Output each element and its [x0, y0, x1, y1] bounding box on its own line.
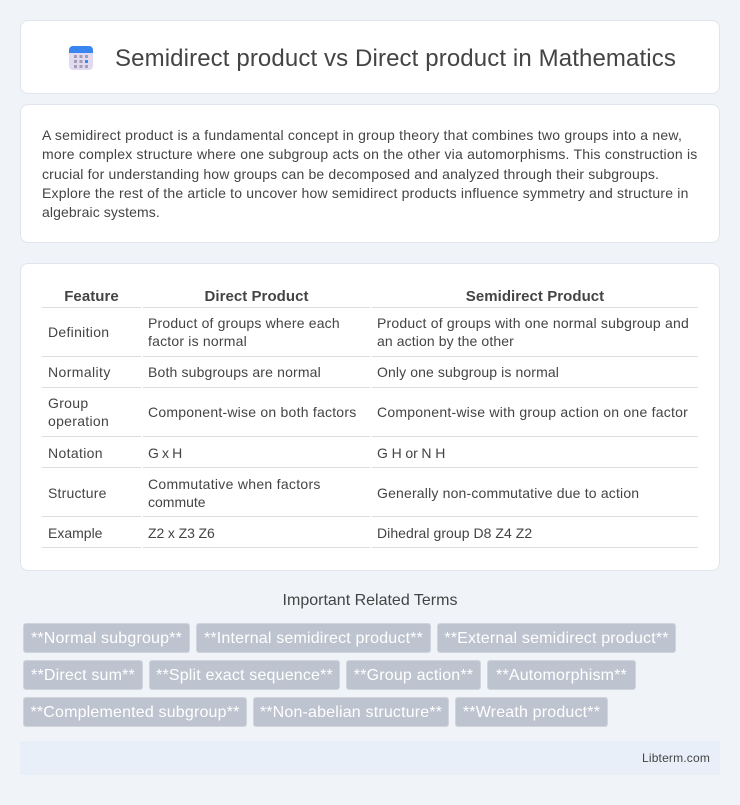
semidirect: example: Dihedral group D8 Z4 Z2 — [377, 525, 532, 541]
tag — [23, 623, 190, 653]
row: Structure: Structure — [48, 485, 107, 501]
footer bar — [20, 741, 720, 775]
direct: definition — [148, 315, 340, 349]
row: Group operation: operation — [48, 413, 109, 429]
tag — [437, 623, 676, 653]
intro paragraph card — [20, 104, 720, 243]
semidirect: group operation: Component-wise with group action on one factor — [377, 404, 688, 420]
tag — [346, 660, 481, 690]
tag: **Split exact sequence** — [156, 667, 333, 684]
related terms heading: Important Related Terms — [283, 592, 457, 609]
comparison table card — [20, 263, 720, 571]
semidirect: definition — [377, 315, 689, 349]
column heading: Direct Product: Direct Product — [204, 288, 309, 305]
direct: normality: Both subgroups are normal — [148, 364, 321, 380]
semidirect: notation: G H or N H — [377, 445, 445, 461]
row: Example: Example — [48, 525, 102, 541]
tag: **Internal semidirect product** — [204, 630, 423, 647]
tag — [455, 697, 608, 727]
direct: notation: G x H — [148, 445, 182, 461]
tag: **Wreath product** — [463, 704, 600, 721]
tag: **Direct sum** — [31, 667, 135, 684]
tag: **Group action** — [354, 667, 473, 684]
tag — [23, 697, 247, 727]
tag — [253, 697, 449, 727]
tag: **Normal subgroup** — [31, 630, 182, 647]
column heading: Semidirect Product: Semidirect Product — [466, 288, 604, 305]
tag — [487, 660, 636, 690]
semidirect: definition: Product of groups with one normal subgroup and — [377, 315, 689, 331]
related term tags — [23, 623, 676, 727]
tag: **Automorphism** — [496, 667, 627, 684]
icon: calendar — [69, 46, 93, 70]
tag — [149, 660, 340, 690]
tag — [196, 623, 431, 653]
row: Group operation: Group — [48, 395, 88, 411]
semidirect: normality: Only one subgroup is normal — [377, 364, 559, 380]
title: Semidirect product vs Direct product in Mathematics — [115, 45, 676, 72]
tag: **Non-abelian structure** — [260, 704, 442, 721]
row: Definition: Definition — [48, 324, 109, 340]
tag — [23, 660, 143, 690]
intro text: more complex structure where one subgroup acts on the other via automorphisms. This construction is — [42, 146, 698, 162]
row: Group operation — [48, 395, 109, 429]
direct: structure: Commutative when factors — [148, 476, 321, 492]
direct: definition: Product of groups where each — [148, 315, 340, 331]
tag: **Complemented subgroup** — [30, 704, 240, 721]
row: Normality: Normality — [48, 364, 111, 380]
column heading: Feature: Feature — [64, 288, 119, 305]
direct: structure — [148, 476, 321, 510]
intro text: algebraic systems. — [42, 204, 160, 220]
direct: structure: commute — [148, 494, 206, 510]
direct: example: Z2 x Z3 Z6 — [148, 525, 215, 541]
intro text — [42, 127, 698, 220]
intro text: Explore the rest of the article to uncover how semidirect products influence symmetry and structure in — [42, 185, 689, 201]
semidirect: definition: an action by the other — [377, 333, 514, 349]
tag: **External semidirect product** — [444, 630, 669, 647]
direct: group operation: Component-wise on both factors — [148, 404, 356, 420]
header card — [20, 20, 720, 94]
direct: definition: factor is normal — [148, 333, 247, 349]
row: Notation: Notation — [48, 445, 103, 461]
intro text: A semidirect product is a fundamental concept in group theory that combines two groups into a new, — [42, 127, 682, 143]
semidirect: structure: Generally non-commutative due to action — [377, 485, 639, 501]
footer credit: Libterm.com — [642, 751, 710, 765]
intro text: crucial for understanding how groups can be decomposed and analyzed through their subgroups. — [42, 166, 659, 182]
